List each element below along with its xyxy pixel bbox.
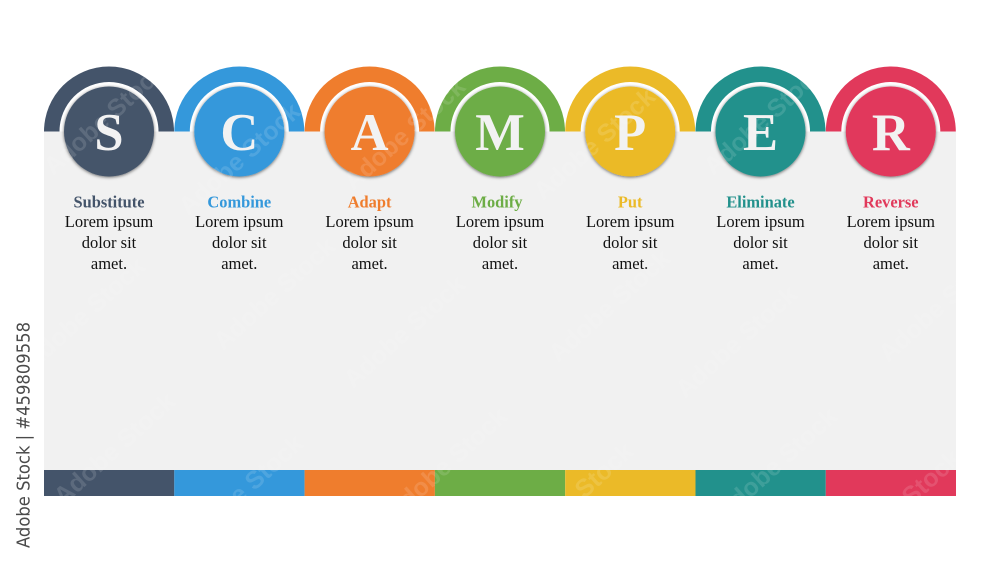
column: Eliminate (696, 67, 826, 273)
column: Adapt: A (351, 104, 389, 162)
column: Combine: amet. (221, 254, 257, 273)
column: Put (565, 67, 695, 273)
column: Put: P (614, 104, 646, 162)
watermarks: Adobe Stock (339, 270, 471, 394)
column: Combine: Combine (207, 192, 271, 212)
column: Combine: C (220, 104, 258, 162)
column: Eliminate: amet. (742, 254, 779, 273)
column: Put: Lorem ipsum (586, 212, 675, 231)
background panel (44, 131, 956, 470)
watermarks: Adobe Stock (177, 429, 309, 553)
watermarks: Adobe Stock (39, 57, 171, 181)
column: Reverse: R (872, 104, 911, 162)
watermarks: Adobe Stock (174, 97, 306, 221)
column: Put: dolor sit (603, 233, 658, 252)
column: Reverse: amet. (873, 254, 909, 273)
watermarks: Adobe Stock (699, 57, 831, 181)
watermarks: Adobe Stock (19, 252, 151, 376)
column: Combine: dolor sit (212, 233, 267, 252)
column: Substitute: S (94, 104, 124, 162)
column: Eliminate: dolor sit (733, 233, 788, 252)
column: Put: amet. (612, 254, 648, 273)
column: Put: Put (618, 192, 643, 212)
column: Substitute: Substitute (73, 192, 145, 212)
watermarks: Adobe Stock (711, 402, 843, 526)
watermarks: Adobe Stock (339, 72, 471, 196)
column: Reverse: dolor sit (864, 233, 918, 252)
column: Modify: M (475, 104, 525, 162)
column: Modify: amet. (482, 254, 518, 273)
stock id vertical caption: Adobe Stock | #459809558 (14, 322, 34, 548)
watermarks: Adobe Stock (671, 280, 803, 404)
column: Adapt (305, 67, 435, 273)
column: Modify (435, 67, 565, 273)
column: Modify: dolor sit (473, 233, 528, 252)
watermarks: Adobe Stock (49, 387, 181, 511)
column: Reverse (826, 67, 956, 273)
watermarks: Adobe Stock (544, 244, 676, 368)
watermarks: Adobe Stock (209, 232, 341, 356)
watermarks: Adobe Stock (529, 82, 661, 206)
column: Modify: Modify (472, 192, 523, 212)
column: Adapt: dolor sit (342, 233, 397, 252)
column: Substitute (44, 67, 174, 273)
column: Reverse: Lorem ipsum (847, 212, 935, 231)
column: Adapt: Lorem ipsum (325, 212, 414, 231)
column: Combine: Lorem ipsum (195, 212, 284, 231)
column: Adapt: Adapt (348, 192, 392, 212)
watermarks: Adobe Stock (507, 437, 639, 561)
column: Substitute: dolor sit (82, 233, 137, 252)
colour bar strip (44, 470, 956, 496)
column: Eliminate: Lorem ipsum (716, 212, 805, 231)
column: Combine (174, 67, 304, 273)
watermarks: Adobe Stock (381, 402, 513, 526)
column: Substitute: Lorem ipsum (65, 212, 153, 231)
column: Reverse: Reverse (863, 192, 919, 212)
column: Modify: Lorem ipsum (456, 212, 544, 231)
column: Eliminate: Eliminate (726, 192, 795, 212)
column: Adapt: amet. (351, 254, 388, 273)
column: Substitute: amet. (91, 254, 127, 273)
column: Eliminate: E (743, 104, 778, 162)
